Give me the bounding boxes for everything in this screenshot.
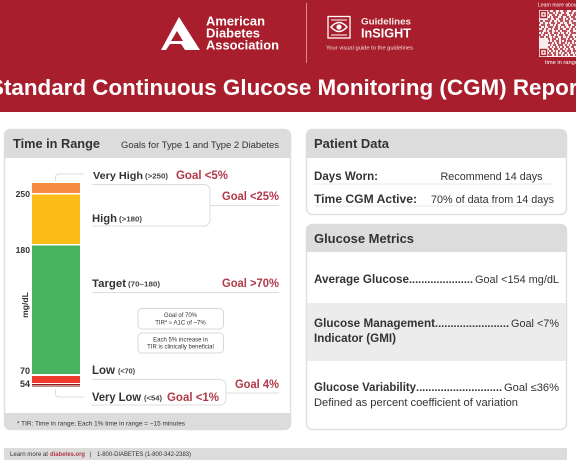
- American Diabetes Association wordmark: Association: [206, 38, 279, 52]
- row: Very High: Goal <5%: [176, 170, 228, 182]
- metric: Glucose Management Indicator: Indicator (GMI): [314, 331, 396, 345]
- row: Low with bracket: (<70): [118, 368, 135, 376]
- American Diabetes Association wordmark: American: [206, 14, 265, 28]
- axis labels: 70: [20, 366, 30, 376]
- callout: goal of 70%: Goal of 70%: [164, 313, 198, 319]
- row: Very Low: (<54): [144, 396, 162, 402]
- Guidelines InSIGHT wordmark: InSIGHT: [361, 26, 411, 40]
- callout: each 5% increase: TIR is clinically beneficial: [147, 344, 214, 350]
- row: Days Worn: Recommend 14 days: [440, 171, 543, 183]
- callout: goal of 70%: TIR* ≈ A1C of ~7%: [155, 320, 206, 326]
- metric: Glucose Management Indicator: Glucose Management: [314, 316, 435, 330]
- metric: Glucose Variability: [314, 380, 560, 409]
- metric: Glucose Management Indicator: [307, 303, 566, 361]
- metric: Glucose Variability: Goal ≤36%: [504, 382, 560, 394]
- metric: Average Glucose: [314, 272, 559, 286]
- row: Low with bracket: Low: [92, 365, 115, 377]
- row: Low with bracket: Goal 4%: [235, 379, 279, 391]
- row: Time CGM Active: Time CGM Active:: [314, 192, 417, 206]
- row: Target: (70–180): [128, 282, 160, 288]
- QR code block: [538, 2, 576, 66]
- metric: Glucose Management Indicator: Goal <7%: [511, 318, 560, 330]
- header banner: [0, 0, 576, 112]
- footer bar: |: [90, 452, 92, 458]
- QR code block: time in range: [545, 60, 576, 66]
- Guidelines InSIGHT wordmark: [326, 16, 414, 52]
- panel: Patient Data: [306, 129, 567, 214]
- icon: ADA triangle logo: [161, 17, 200, 50]
- row: Time CGM Active: [314, 192, 555, 206]
- footer bar: 1-800-DIABETES (1-800-342-2383): [97, 452, 191, 458]
- Guidelines InSIGHT wordmark: Your visual guide to the guidelines: [326, 46, 414, 52]
- row: Very Low: [56, 389, 219, 404]
- heading: Patient Data: Patient Data: [314, 137, 390, 151]
- callout: each 5% increase: Each 5% increase in: [153, 338, 208, 344]
- row: Very High: Very High: [93, 170, 143, 182]
- row: Very Low: Very Low: [92, 392, 141, 404]
- footer bar: [4, 448, 567, 460]
- metric: Glucose Variability: Glucose Variability: [314, 380, 416, 394]
- metric: Average Glucose: .....................: [409, 274, 473, 286]
- American Diabetes Association wordmark: [206, 14, 279, 52]
- callout: goal of 70%: [138, 308, 224, 329]
- icon: Guidelines InSIGHT eye: [328, 16, 350, 38]
- heading: Time in Range: Time in Range: [13, 136, 100, 151]
- metric: Glucose Variability: Defined as percent coefficient of variation: [314, 397, 518, 409]
- axis labels: 54: [20, 379, 30, 389]
- metric: Average Glucose: Goal <154 mg/dL: [475, 274, 559, 286]
- callout: each 5% increase: [138, 333, 224, 353]
- subheading: goals: Goals for Type 1 and Type 2 Diabetes: [121, 140, 279, 150]
- row: Very High: (>250): [145, 174, 168, 180]
- footer bar: diabetes.org: [50, 452, 85, 458]
- row: Time CGM Active: 70% of data from 14 days: [431, 194, 555, 206]
- axis labels: mg/dL: [20, 292, 30, 318]
- axis labels: 250: [16, 189, 30, 199]
- row: Days Worn: [314, 169, 552, 184]
- heading: Glucose Metrics: Glucose Metrics: [314, 232, 414, 246]
- stacked range bar: [32, 183, 80, 386]
- row: Target: [92, 278, 279, 292]
- panel: Time in Range: [4, 129, 291, 430]
- row: High with bracket: (>180): [119, 216, 142, 224]
- metric: Glucose Variability: ............................: [416, 382, 502, 394]
- title: Standard Continuous Glucose Monitoring (CGM) Report: [0, 75, 576, 100]
- metric: Average Glucose: Average Glucose: [314, 272, 409, 286]
- row: Target: Target: [92, 278, 126, 290]
- Guidelines InSIGHT wordmark: Guidelines: [361, 16, 411, 28]
- row: Very Low: Goal <1%: [167, 392, 219, 404]
- row: High with bracket: [92, 184, 279, 226]
- panel: Glucose Metrics: [306, 224, 567, 430]
- axis labels: 180: [16, 245, 30, 255]
- row: Very High: [56, 170, 228, 182]
- row: Low with bracket: [92, 365, 279, 405]
- row: High with bracket: Goal <25%: [222, 191, 279, 203]
- American Diabetes Association wordmark: Diabetes: [206, 26, 260, 40]
- row: Target: Goal >70%: [222, 278, 279, 290]
- footer bar: Learn more at: [10, 452, 48, 458]
- row: Days Worn: Days Worn:: [314, 169, 378, 183]
- row: High with bracket: High: [92, 213, 117, 225]
- axis labels: [16, 189, 30, 389]
- metric: Glucose Management Indicator: ........................: [435, 318, 509, 330]
- footnote: * TIR: Time in range; Each 1% time in range = ~15 minutes: [17, 420, 185, 428]
